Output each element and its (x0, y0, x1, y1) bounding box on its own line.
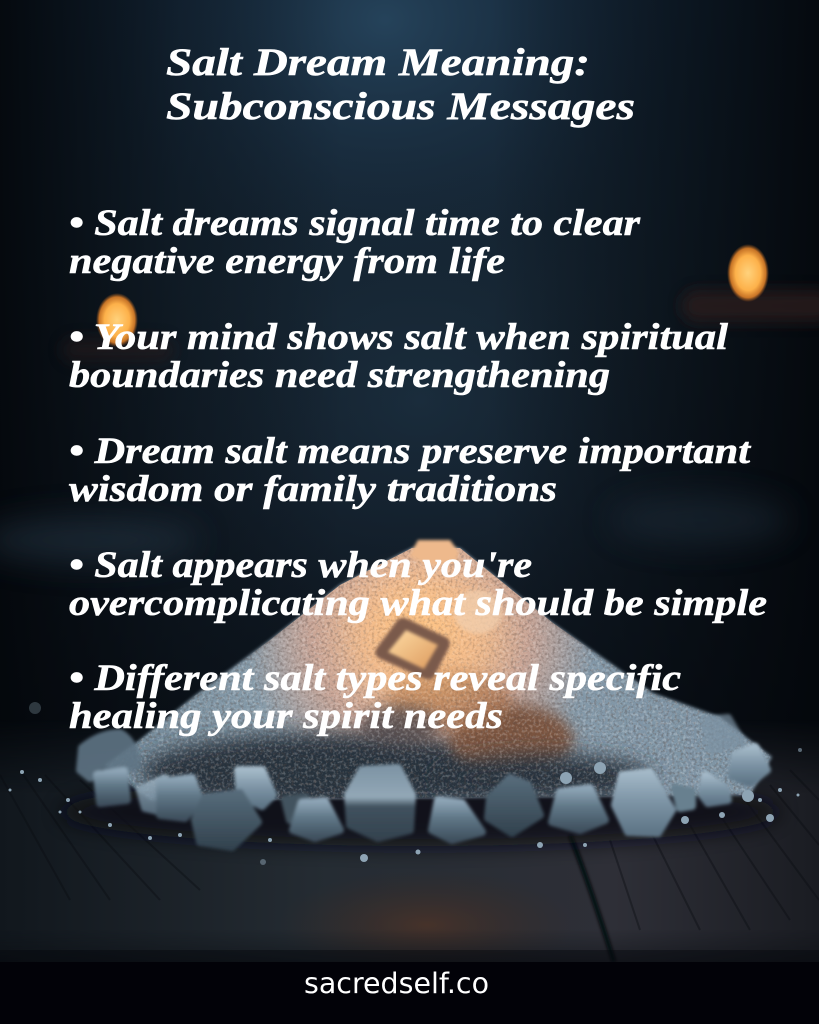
title (166, 41, 635, 128)
bullet 3: • Dream salt means preserve important (69, 431, 752, 472)
bullet 1: • Salt dreams signal time to clear (69, 203, 641, 244)
bullet 4: • Salt appears when you're (69, 545, 532, 586)
bullet 2 (69, 317, 729, 396)
bullet 1 (69, 203, 641, 282)
bullet 4 (69, 545, 767, 624)
bullet 3: wisdom or family traditions (69, 469, 557, 510)
bullet 5: healing your spirit needs (69, 696, 503, 737)
bullet 2: • Your mind shows salt when spiritual (69, 317, 729, 358)
wooden floor (0, 744, 819, 962)
bullet 3 (69, 431, 752, 510)
bullet 5 (69, 658, 681, 737)
footer band (0, 950, 819, 1024)
salt cube: glowing center (377, 619, 448, 678)
bullet 2: boundaries need strengthening (69, 355, 610, 396)
bullet list (69, 203, 767, 737)
scattered salt grains (8, 702, 802, 865)
title: Subconscious Messages (166, 85, 635, 128)
title: Salt Dream Meaning: (166, 41, 590, 84)
footer website: sacredself.co (304, 967, 489, 1000)
salt cube: top (409, 540, 459, 566)
salt crystal: right of cube (454, 590, 502, 634)
candle: right (682, 244, 819, 322)
salt pile (107, 537, 774, 802)
salt crystals (80, 718, 767, 847)
bullet 5: • Different salt types reveal specific (69, 658, 681, 699)
bullet 1: negative energy from life (69, 241, 505, 282)
candle: left (62, 293, 174, 362)
shadow beneath salt (60, 778, 780, 846)
bullet 4: overcomplicating what should be simple (69, 583, 767, 624)
